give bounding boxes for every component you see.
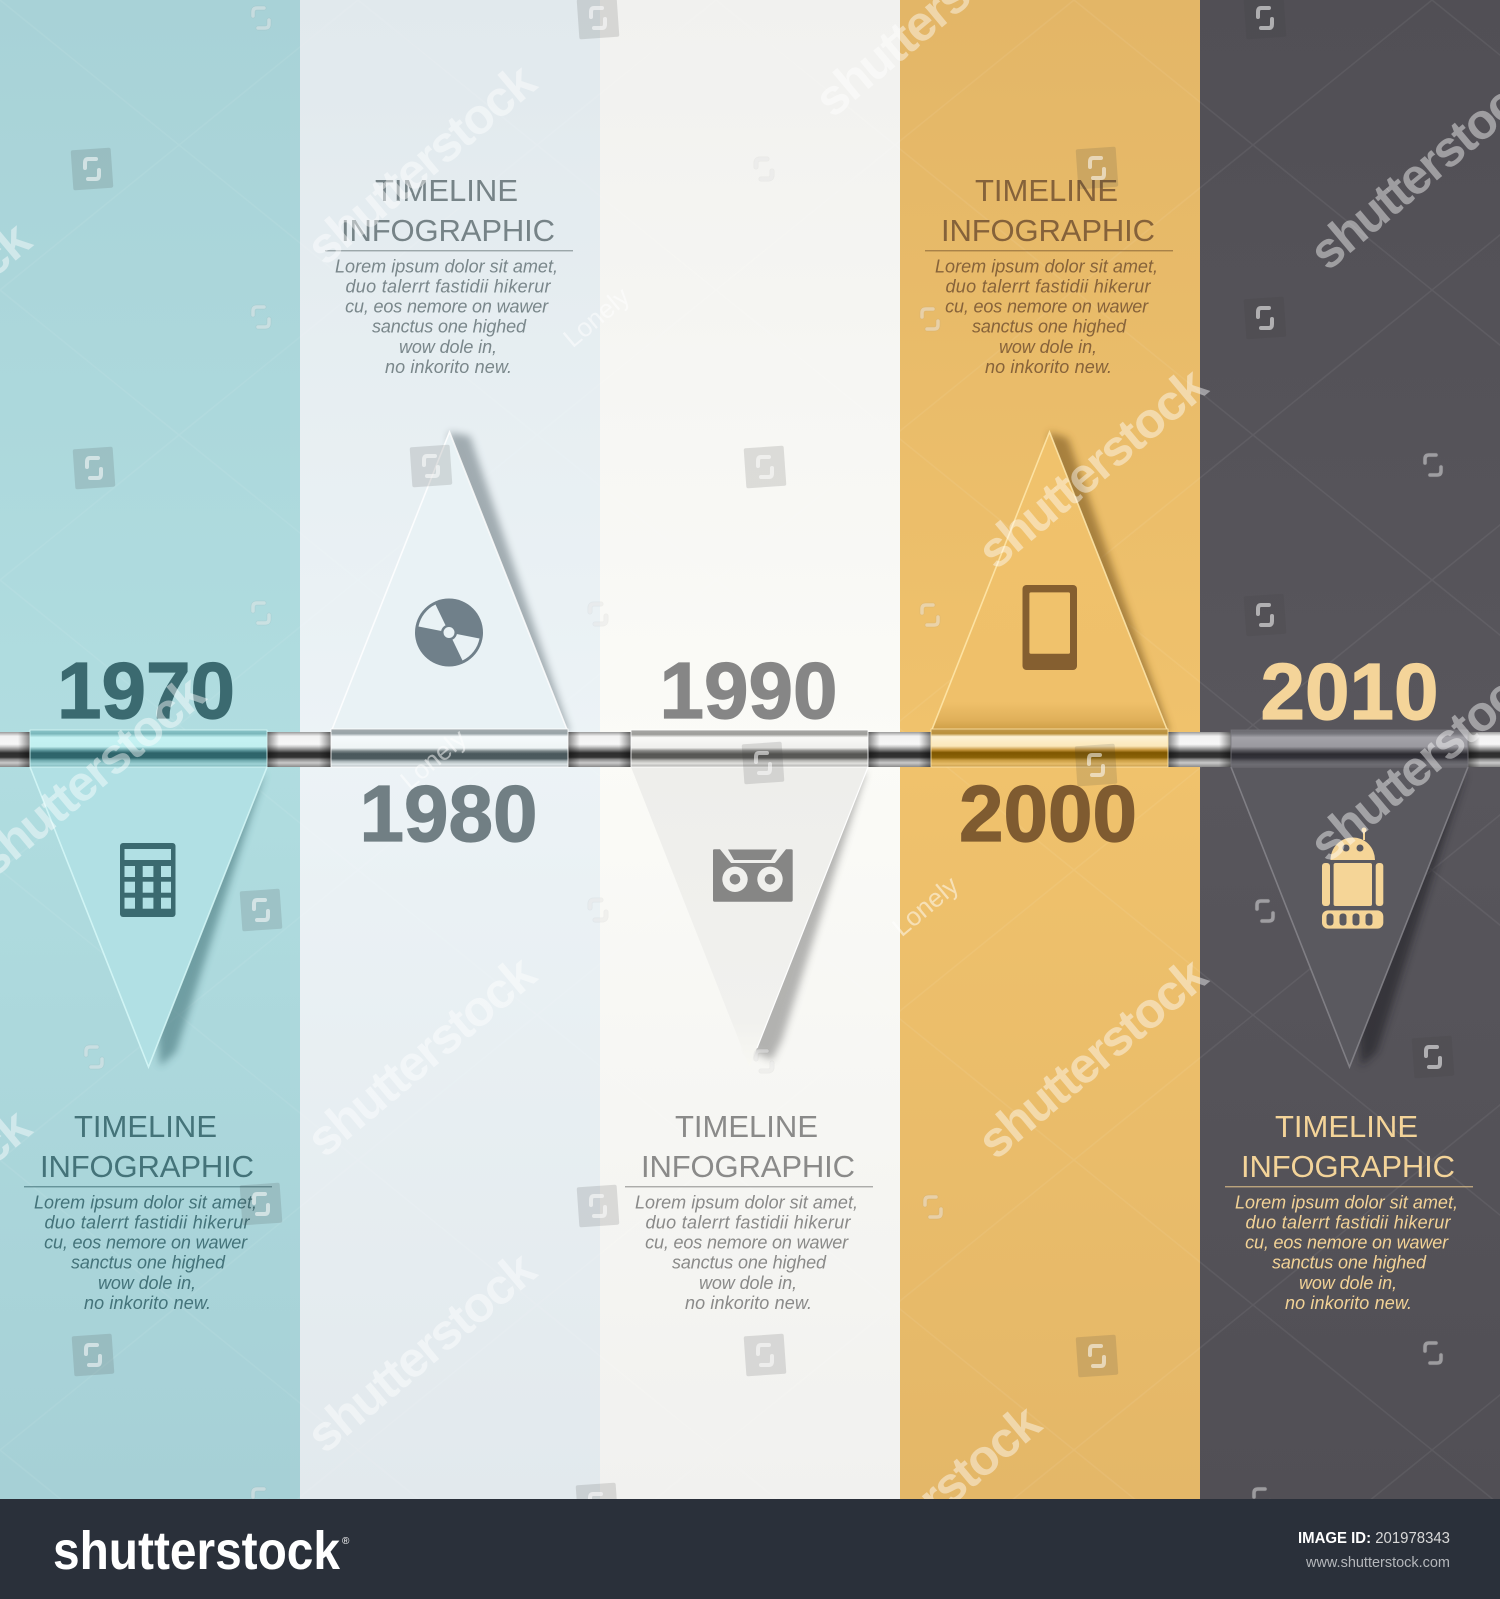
text block: 1970: TIMELINE [74, 1109, 217, 1144]
text block: 2000: Lorem ipsum dolor sit amet, [935, 257, 1158, 277]
icon: smartphone [1022, 585, 1077, 670]
watermark overlay: shutterstock [967, 946, 1217, 1169]
text block: 1980: no inkorito new. [385, 357, 512, 377]
text block: 2000: no inkorito new. [985, 357, 1112, 377]
year: 2010: 2010 [1260, 647, 1438, 736]
clip: 2010 dark [1231, 730, 1468, 767]
text block: 1970: no inkorito new. [84, 1293, 211, 1313]
clip: 1970 teal [30, 730, 267, 767]
watermark overlay: shutterstock [296, 1240, 546, 1463]
footer url: www.shutterstock.com [1305, 1554, 1450, 1571]
text block: 1990 [625, 1109, 873, 1313]
text block: 1990: no inkorito new. [685, 1293, 812, 1313]
text block: 2000: sanctus one highed [972, 317, 1127, 337]
triangle: 1990 pennant [631, 767, 868, 1067]
watermark overlay: Lonely [394, 723, 472, 795]
text block: 1990: INFOGRAPHIC [641, 1149, 855, 1184]
text block: 1970: INFOGRAPHIC [40, 1149, 254, 1184]
icon: robot [1322, 828, 1383, 929]
chrome timeline bar [0, 729, 1500, 767]
panel: 1990 column background [600, 0, 900, 1499]
text block: 1990: Lorem ipsum dolor sit amet, [635, 1193, 858, 1213]
watermark overlay: Lonely [557, 281, 635, 353]
text block: 1980: duo talerrt fastidii hikerur [346, 277, 552, 297]
text block: 1990: wow dole in, [699, 1273, 797, 1293]
text block: 1970: sanctus one highed [71, 1253, 226, 1273]
text block: 1970: cu, eos nemore on wawer [44, 1233, 248, 1253]
text block: 1980: TIMELINE [375, 173, 518, 208]
text block: 2010: TIMELINE [1275, 1109, 1418, 1144]
text block: 1970: duo talerrt fastidii hikerur [44, 1213, 250, 1233]
watermark overlay: shutterstock [296, 944, 546, 1167]
watermark overlay: Lonely [886, 870, 964, 942]
text block: 2010: sanctus one highed [1272, 1253, 1427, 1273]
text block: 2010: wow dole in, [1299, 1273, 1397, 1293]
triangle: 2010 pennant [1231, 767, 1468, 1067]
year: 1980: 1980 [360, 769, 538, 858]
text block: 1980: wow dole in, [399, 337, 497, 357]
text block: 2000: wow dole in, [999, 337, 1097, 357]
text block: 2000: INFOGRAPHIC [941, 213, 1155, 248]
watermark overlay: shutterstock [967, 356, 1217, 579]
text block: 1980: INFOGRAPHIC [341, 213, 555, 248]
icon: compact disc [415, 598, 483, 666]
text block: 2010: duo talerrt fastidii hikerur [1246, 1213, 1452, 1233]
panel: 1980 column background [300, 0, 600, 1499]
text block: 2000: duo talerrt fastidii hikerur [946, 277, 1152, 297]
text block: 1970: wow dole in, [98, 1273, 196, 1293]
panel: 2000 column background [900, 0, 1200, 1499]
triangle: 1980 pennant [331, 432, 570, 732]
text block: 1970 [24, 1109, 272, 1313]
text block: 1990: sanctus one highed [672, 1253, 827, 1273]
text block: 2010: no inkorito new. [1285, 1293, 1412, 1313]
text block: 2010: cu, eos nemore on wawer [1245, 1233, 1449, 1253]
footer bar [0, 1499, 1500, 1599]
clip: 1980 silver [331, 729, 568, 767]
panel: 2010 column background [1200, 0, 1500, 1499]
icon: calculator [120, 843, 176, 917]
text block: 2000: TIMELINE [975, 173, 1118, 208]
year: 2000: 2000 [959, 769, 1137, 858]
clip: 1990 grey [631, 730, 868, 767]
text block: 1990: TIMELINE [675, 1109, 818, 1144]
panel: 1970 column background [0, 0, 300, 1499]
text block: 1970: Lorem ipsum dolor sit amet, [34, 1193, 257, 1213]
year: 1970: 1970 [57, 646, 235, 735]
text block: 2000 [925, 173, 1173, 377]
text block: 1990: cu, eos nemore on wawer [645, 1233, 849, 1253]
text block: 2010 [1225, 1109, 1473, 1313]
icon: cassette tape [713, 849, 793, 902]
text block: 1980: cu, eos nemore on wawer [345, 297, 549, 317]
watermark overlay: shutterstock [296, 52, 546, 275]
triangle: 1970 pennant [30, 767, 267, 1067]
footer logo: shutterstock [53, 1521, 341, 1581]
text block: 2010: Lorem ipsum dolor sit amet, [1235, 1193, 1458, 1213]
triangle: 2000 pennant [931, 432, 1170, 732]
text block: 2010: INFOGRAPHIC [1241, 1149, 1455, 1184]
text block: 1980: sanctus one highed [372, 317, 527, 337]
text block: 1980 [325, 173, 573, 377]
text block: 1990: duo talerrt fastidii hikerur [646, 1213, 852, 1233]
text block: 2000: cu, eos nemore on wawer [945, 297, 1149, 317]
clip: 2000 gold [931, 729, 1168, 767]
footer logo: ® [342, 1536, 350, 1547]
footer image id: IMAGE ID: 201978343 [1298, 1530, 1450, 1547]
text block: 1980: Lorem ipsum dolor sit amet, [335, 257, 558, 277]
year: 1990: 1990 [660, 646, 838, 735]
